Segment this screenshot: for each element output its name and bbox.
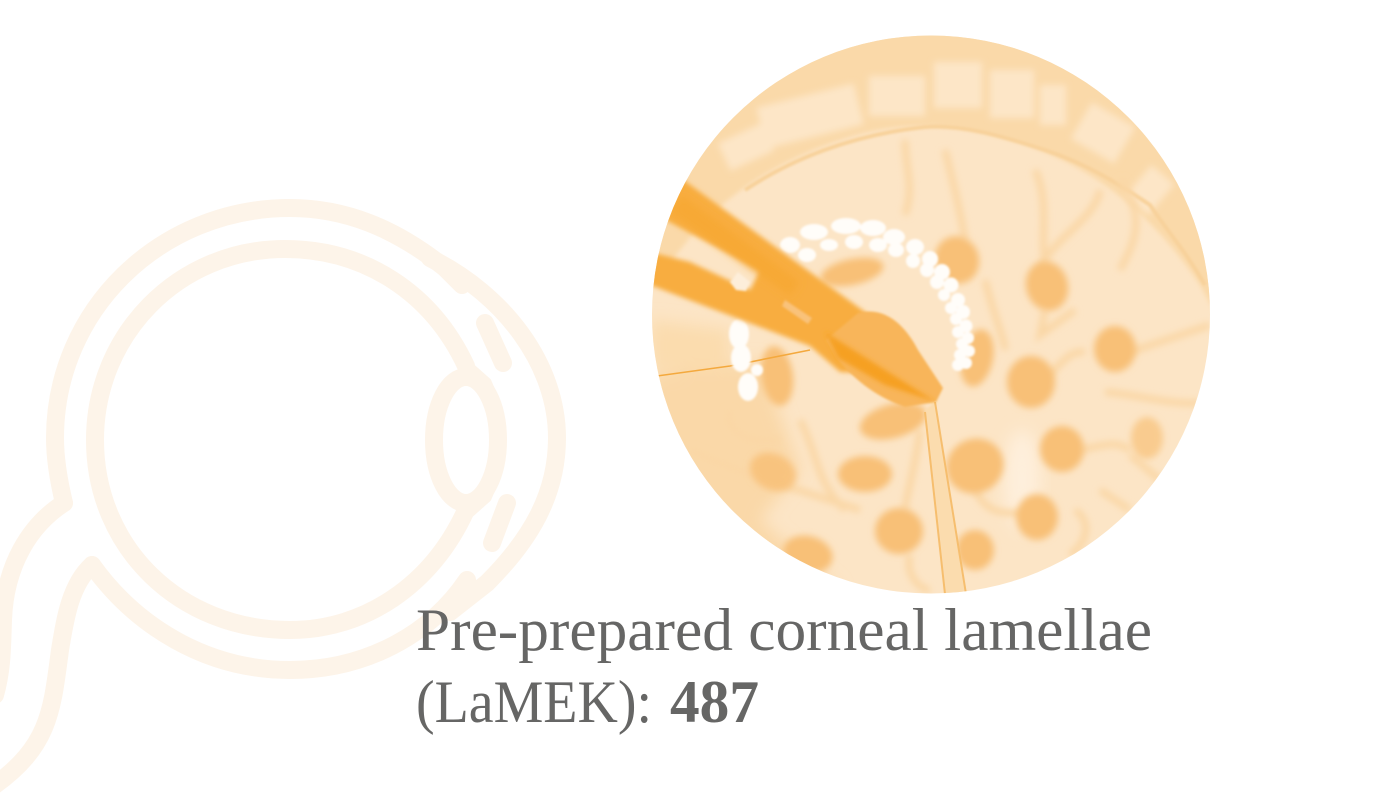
value 487: 487 <box>670 669 759 735</box>
outer limbal band <box>654 36 1210 306</box>
icon: eye cross-section watermark <box>0 208 557 785</box>
caption line 2 label: (LaMEK): <box>416 669 652 735</box>
vessels <box>788 139 1210 594</box>
cells <box>744 230 1163 578</box>
white reflection dots <box>729 218 975 401</box>
lower lamella flap <box>925 402 966 594</box>
forceps <box>653 179 868 376</box>
forceps glint <box>730 272 750 291</box>
thin thread line <box>657 350 810 376</box>
light centre glow <box>1004 430 1040 530</box>
caption line 1: Pre-prepared corneal lamellae <box>416 597 1152 663</box>
lower left darker tissue <box>652 319 826 573</box>
caption: pre-prepared corneal lamellae count <box>416 597 1152 735</box>
held lamella <box>825 312 943 407</box>
limbal arc line <box>745 127 1205 285</box>
photo: corneal lamella held by forceps <box>652 36 1210 594</box>
